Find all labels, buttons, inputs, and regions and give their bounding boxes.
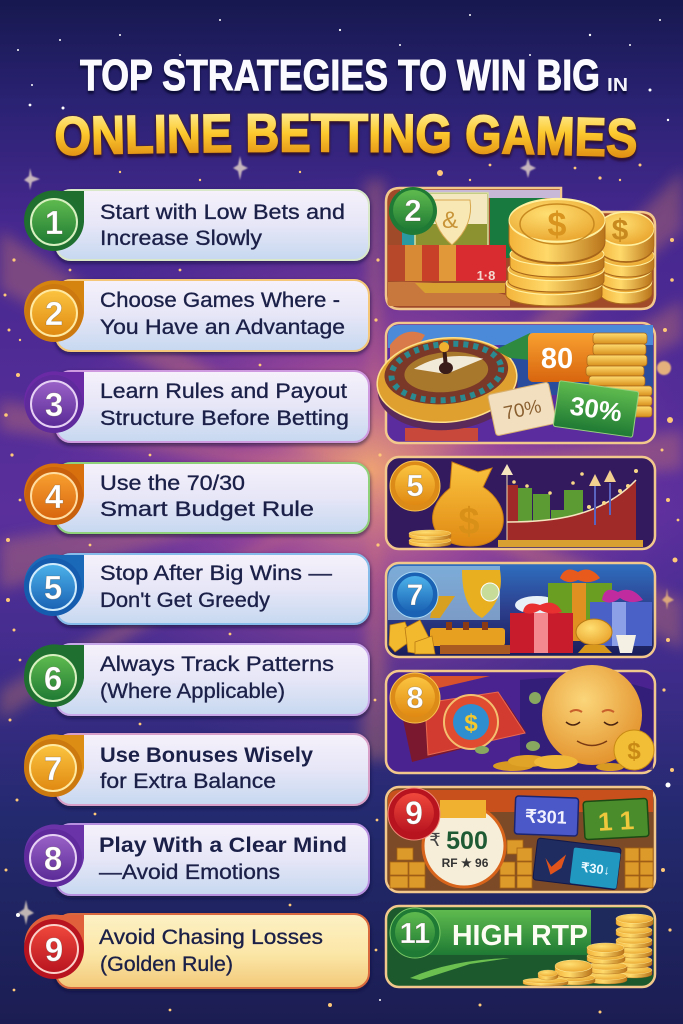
card 3 text — [100, 379, 349, 430]
card 5 — [24, 554, 369, 624]
panel: coins on table — [386, 187, 655, 309]
card 8 — [24, 824, 369, 895]
badge 1 — [24, 190, 84, 251]
card 7 text: for Extra Balance — [100, 769, 276, 793]
500 chip: ₹ — [429, 830, 441, 850]
card 9 text: (Golden Rule) — [100, 952, 233, 976]
money bag — [433, 462, 503, 546]
title line 1: IN — [607, 75, 628, 95]
badge 8 — [24, 824, 84, 887]
gifts — [510, 570, 652, 653]
navy card with teal ticket — [533, 838, 621, 890]
card 5 text — [100, 561, 333, 612]
card 8 text: —Avoid Emotions — [99, 860, 280, 884]
panel: loss limits and gold bricks — [386, 787, 655, 892]
card 4 — [24, 463, 369, 533]
card 2 text: Choose Games Where - — [100, 288, 340, 312]
badge 7 — [24, 734, 84, 797]
red wallet: $ — [464, 710, 478, 737]
smiley face — [542, 665, 642, 765]
panel: roulette and 70/30 — [374, 323, 655, 443]
card 1 text: Start with Low Bets and — [100, 200, 345, 224]
badge 9 — [24, 914, 84, 979]
card 2 text: You Have an Advantage — [100, 315, 345, 339]
card 8 text: Play With a Clear Mind — [99, 833, 347, 857]
coin stacks — [523, 914, 653, 986]
badge: 7 — [392, 572, 438, 618]
badge: 9 — [388, 788, 440, 840]
red wallet — [402, 692, 526, 762]
70% ticket — [488, 382, 557, 436]
70% ticket: 70% — [502, 396, 543, 425]
card 2 text — [100, 288, 345, 339]
card 9 text — [99, 925, 323, 976]
badge 2: 2 — [45, 295, 63, 332]
badge 7: 7 — [44, 750, 62, 787]
coin stacks — [506, 199, 654, 306]
badge 9: 9 — [45, 931, 63, 968]
badge 1: 1 — [45, 204, 63, 241]
card 6 text: Always Track Patterns — [100, 652, 334, 676]
card 1 text — [100, 200, 345, 250]
coin stack — [586, 333, 652, 417]
coin and cup — [576, 619, 636, 653]
title — [54, 51, 638, 162]
badge: 2 — [389, 187, 437, 235]
card 1 — [24, 190, 369, 260]
card 5 text: Don't Get Greedy — [100, 588, 270, 612]
badge 5 — [24, 554, 84, 616]
card 4 text — [100, 471, 314, 521]
badge 4: 4 — [45, 478, 64, 515]
30% banner: 30% — [568, 391, 624, 427]
card 9 — [24, 914, 369, 988]
card 6 — [24, 644, 369, 715]
money bag: $ — [458, 501, 480, 543]
navy card with teal ticket: ₹30↓ — [580, 859, 611, 878]
roulette wheel — [374, 332, 521, 436]
badge 3: 3 — [45, 386, 63, 423]
blue card — [514, 796, 579, 836]
card 3 text: Learn Rules and Payout — [100, 379, 347, 403]
coins: $ — [627, 738, 641, 765]
badge: 2: 2 — [404, 193, 422, 228]
badge: 8 — [390, 673, 440, 723]
gold bricks — [390, 840, 653, 888]
badge: 5: 5 — [406, 468, 424, 503]
badge 3 — [24, 371, 84, 433]
500 chip: 500 — [446, 827, 488, 855]
500 chip: RF ★ 96 — [442, 856, 489, 870]
badge: 11: 11 — [400, 918, 430, 950]
card 7 text — [100, 743, 313, 793]
badge 4 — [24, 463, 84, 525]
high RTP label: HIGH RTP — [452, 920, 588, 952]
card 6 text: (Where Applicable) — [100, 679, 285, 703]
green card — [583, 798, 649, 840]
badge 6 — [24, 644, 84, 707]
card 5 text: Stop After Big Wins — — [100, 561, 333, 585]
30% banner — [553, 381, 639, 437]
badge 2 — [24, 280, 84, 342]
panel: bonus gifts — [386, 563, 655, 657]
blue card: ₹301 — [525, 806, 567, 828]
badge: 11 — [390, 908, 440, 958]
500 chip — [423, 805, 505, 887]
coin stack — [409, 530, 451, 547]
badge 8: 8 — [44, 840, 62, 877]
card 6 text — [100, 652, 334, 703]
card 8 text — [99, 833, 347, 884]
card 7 — [24, 734, 369, 805]
panel: coins on table: 1·8 — [477, 268, 495, 283]
green card: 1 1 — [597, 805, 635, 837]
card 9 text: Avoid Chasing Losses — [99, 925, 323, 949]
badge: 9: 9 — [405, 795, 423, 831]
badge 6: 6 — [44, 660, 62, 697]
panel: high RTP — [386, 906, 655, 987]
card 1 text: Increase Slowly — [100, 226, 262, 250]
decorative sparkles — [18, 156, 674, 925]
rising chart — [501, 464, 638, 540]
title line 2: ONLINE BETTING GAMES — [54, 112, 638, 162]
coins — [493, 730, 654, 771]
panel: coins on table: & — [442, 207, 458, 234]
badge: 8: 8 — [406, 680, 424, 715]
card 3 — [24, 371, 369, 442]
panel: calm mind — [386, 665, 655, 773]
orange 80 sign: 80 — [541, 343, 573, 375]
badge: 7: 7 — [407, 579, 423, 612]
gold pile — [389, 620, 435, 654]
coin stacks: $ — [612, 214, 629, 247]
card 2 — [24, 280, 369, 351]
coin stacks: $ — [548, 206, 567, 244]
card 7 text: Use Bonuses Wisely — [100, 743, 313, 767]
card 4 text: Smart Budget Rule — [100, 497, 314, 521]
badge: 5 — [390, 461, 440, 511]
card 3 text: Structure Before Betting — [100, 406, 349, 430]
badge 5: 5 — [44, 569, 62, 606]
panel: money bag and rising chart — [386, 457, 655, 549]
orange 80 sign — [528, 333, 603, 382]
card 4 text: Use the 70/30 — [100, 471, 245, 495]
